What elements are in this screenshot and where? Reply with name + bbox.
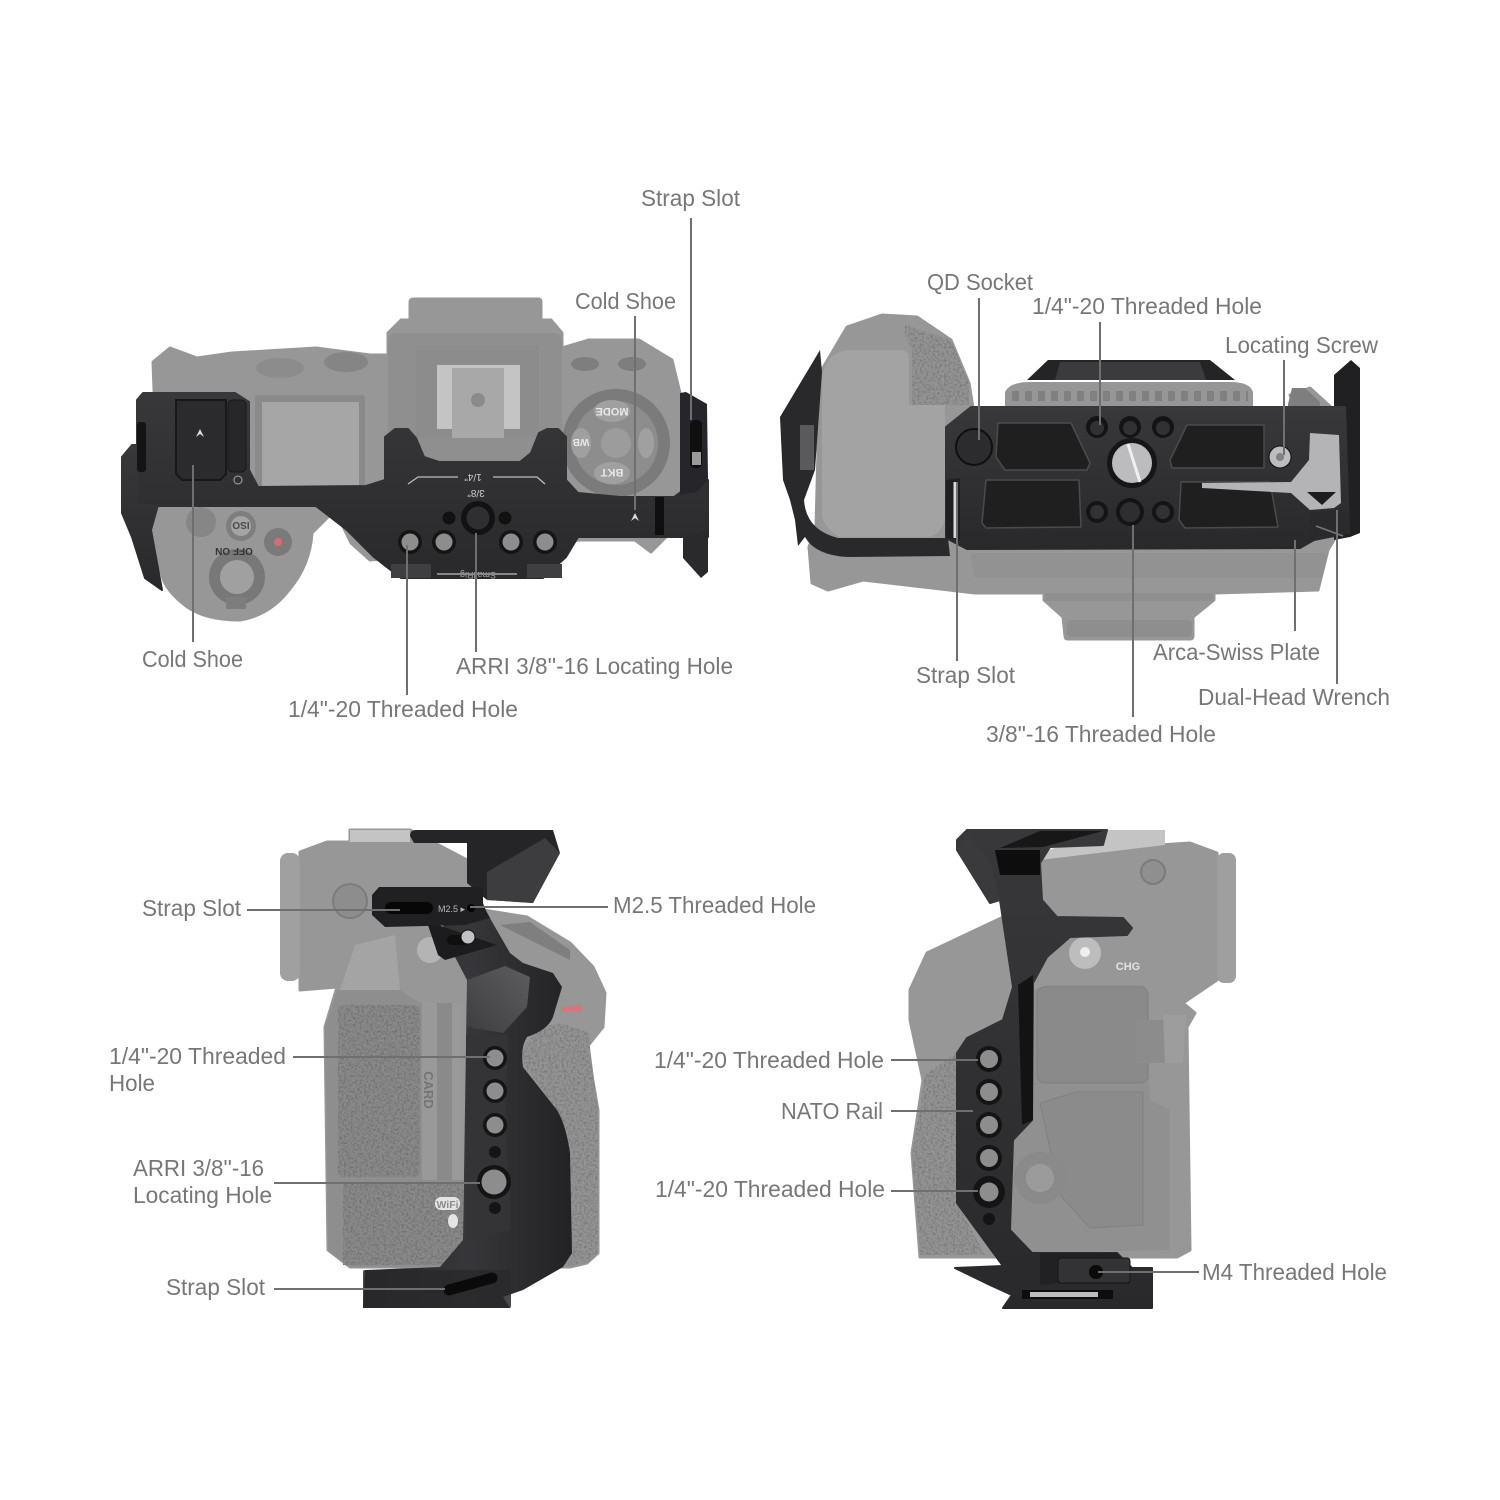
camera body base view xyxy=(809,315,1345,639)
labels: ARRI 3/8''-16 Locating Hole xyxy=(456,653,733,679)
camera button labels: OFF ON xyxy=(215,545,253,556)
labels: Locating Hole xyxy=(133,1182,272,1208)
wifi mark: WiFi xyxy=(436,1199,459,1211)
engraved marks xyxy=(408,477,545,484)
labels: Arca-Swiss Plate xyxy=(1153,639,1320,665)
strap slot lower xyxy=(449,1278,492,1290)
camera port side body xyxy=(910,830,1236,1257)
cage L-bracket xyxy=(780,350,1360,557)
labels xyxy=(109,185,1390,1300)
labels: Cold Shoe xyxy=(142,646,243,672)
camera body top view xyxy=(151,299,680,620)
mounting pads xyxy=(982,423,1278,528)
card label: CARD xyxy=(421,1071,436,1109)
labels: M2.5 Threaded Hole xyxy=(613,892,816,918)
camera button labels: MODE xyxy=(596,405,628,417)
labels: NATO Rail xyxy=(781,1098,883,1124)
cold shoe left xyxy=(176,400,226,480)
holes xyxy=(1086,416,1174,526)
strap slot upper xyxy=(385,902,433,914)
labels: ARRI 3/8''-16 xyxy=(133,1155,264,1181)
locating screw xyxy=(1269,446,1291,468)
holes xyxy=(477,1046,511,1214)
clamp screw xyxy=(447,935,469,945)
dual-head wrench xyxy=(1202,433,1341,510)
labels: Strap Slot xyxy=(916,662,1016,688)
labels: 1/4"-20 Threaded xyxy=(109,1043,286,1069)
cage plate top view: SmallRig xyxy=(460,570,496,580)
camera button labels: ISO xyxy=(232,519,250,530)
labels: Cold Shoe xyxy=(575,288,676,314)
cage grip and clamp xyxy=(363,830,572,1308)
cage plate top view: 1/4" xyxy=(464,471,482,482)
bottom slot xyxy=(1022,1290,1113,1299)
labels: Hole xyxy=(109,1070,155,1096)
labels: Strap Slot xyxy=(142,895,242,921)
labels: Dual-Head Wrench xyxy=(1198,684,1390,710)
callout lines xyxy=(193,218,1337,1289)
panel: grip side view xyxy=(280,830,605,1308)
labels: Locating Screw xyxy=(1225,332,1378,358)
labels: Strap Slot xyxy=(641,185,741,211)
camera button labels: BKT xyxy=(600,466,623,478)
camera button labels: WB xyxy=(573,436,589,447)
labels: 1/4"-20 Threaded Hole xyxy=(1032,293,1262,319)
cage plate top view xyxy=(122,392,708,590)
lens mount ring xyxy=(1005,382,1253,407)
QD socket xyxy=(956,429,992,465)
M2.5 marking: M2.5 ▸ xyxy=(438,904,466,914)
labels: 1/4"-20 Threaded Hole xyxy=(288,696,518,722)
threaded holes xyxy=(398,501,557,554)
wifi mark xyxy=(435,1197,460,1228)
cage frame xyxy=(955,830,1152,1308)
captive screw xyxy=(1107,438,1157,488)
labels: 1/4"-20 Threaded Hole xyxy=(655,1176,885,1202)
camera grip side body xyxy=(280,830,605,1267)
labels: 1/4"-20 Threaded Hole xyxy=(654,1047,884,1073)
labels: QD Socket xyxy=(927,269,1034,295)
labels: 3/8"-16 Threaded Hole xyxy=(986,721,1216,747)
labels: Strap Slot xyxy=(166,1274,266,1300)
M4 plate xyxy=(1058,1258,1130,1283)
camera button labels xyxy=(215,405,628,556)
panel: top view xyxy=(122,299,708,620)
red accent xyxy=(561,1005,582,1012)
CHG label: CHG xyxy=(1116,961,1140,973)
cage plate top view: 3/8" xyxy=(467,487,485,498)
panel: bottom plate view xyxy=(780,315,1360,639)
cold shoe right xyxy=(631,513,639,521)
labels: M4 Threaded Hole xyxy=(1202,1259,1387,1285)
holes xyxy=(973,1046,1103,1279)
panel: port side view xyxy=(910,830,1236,1308)
